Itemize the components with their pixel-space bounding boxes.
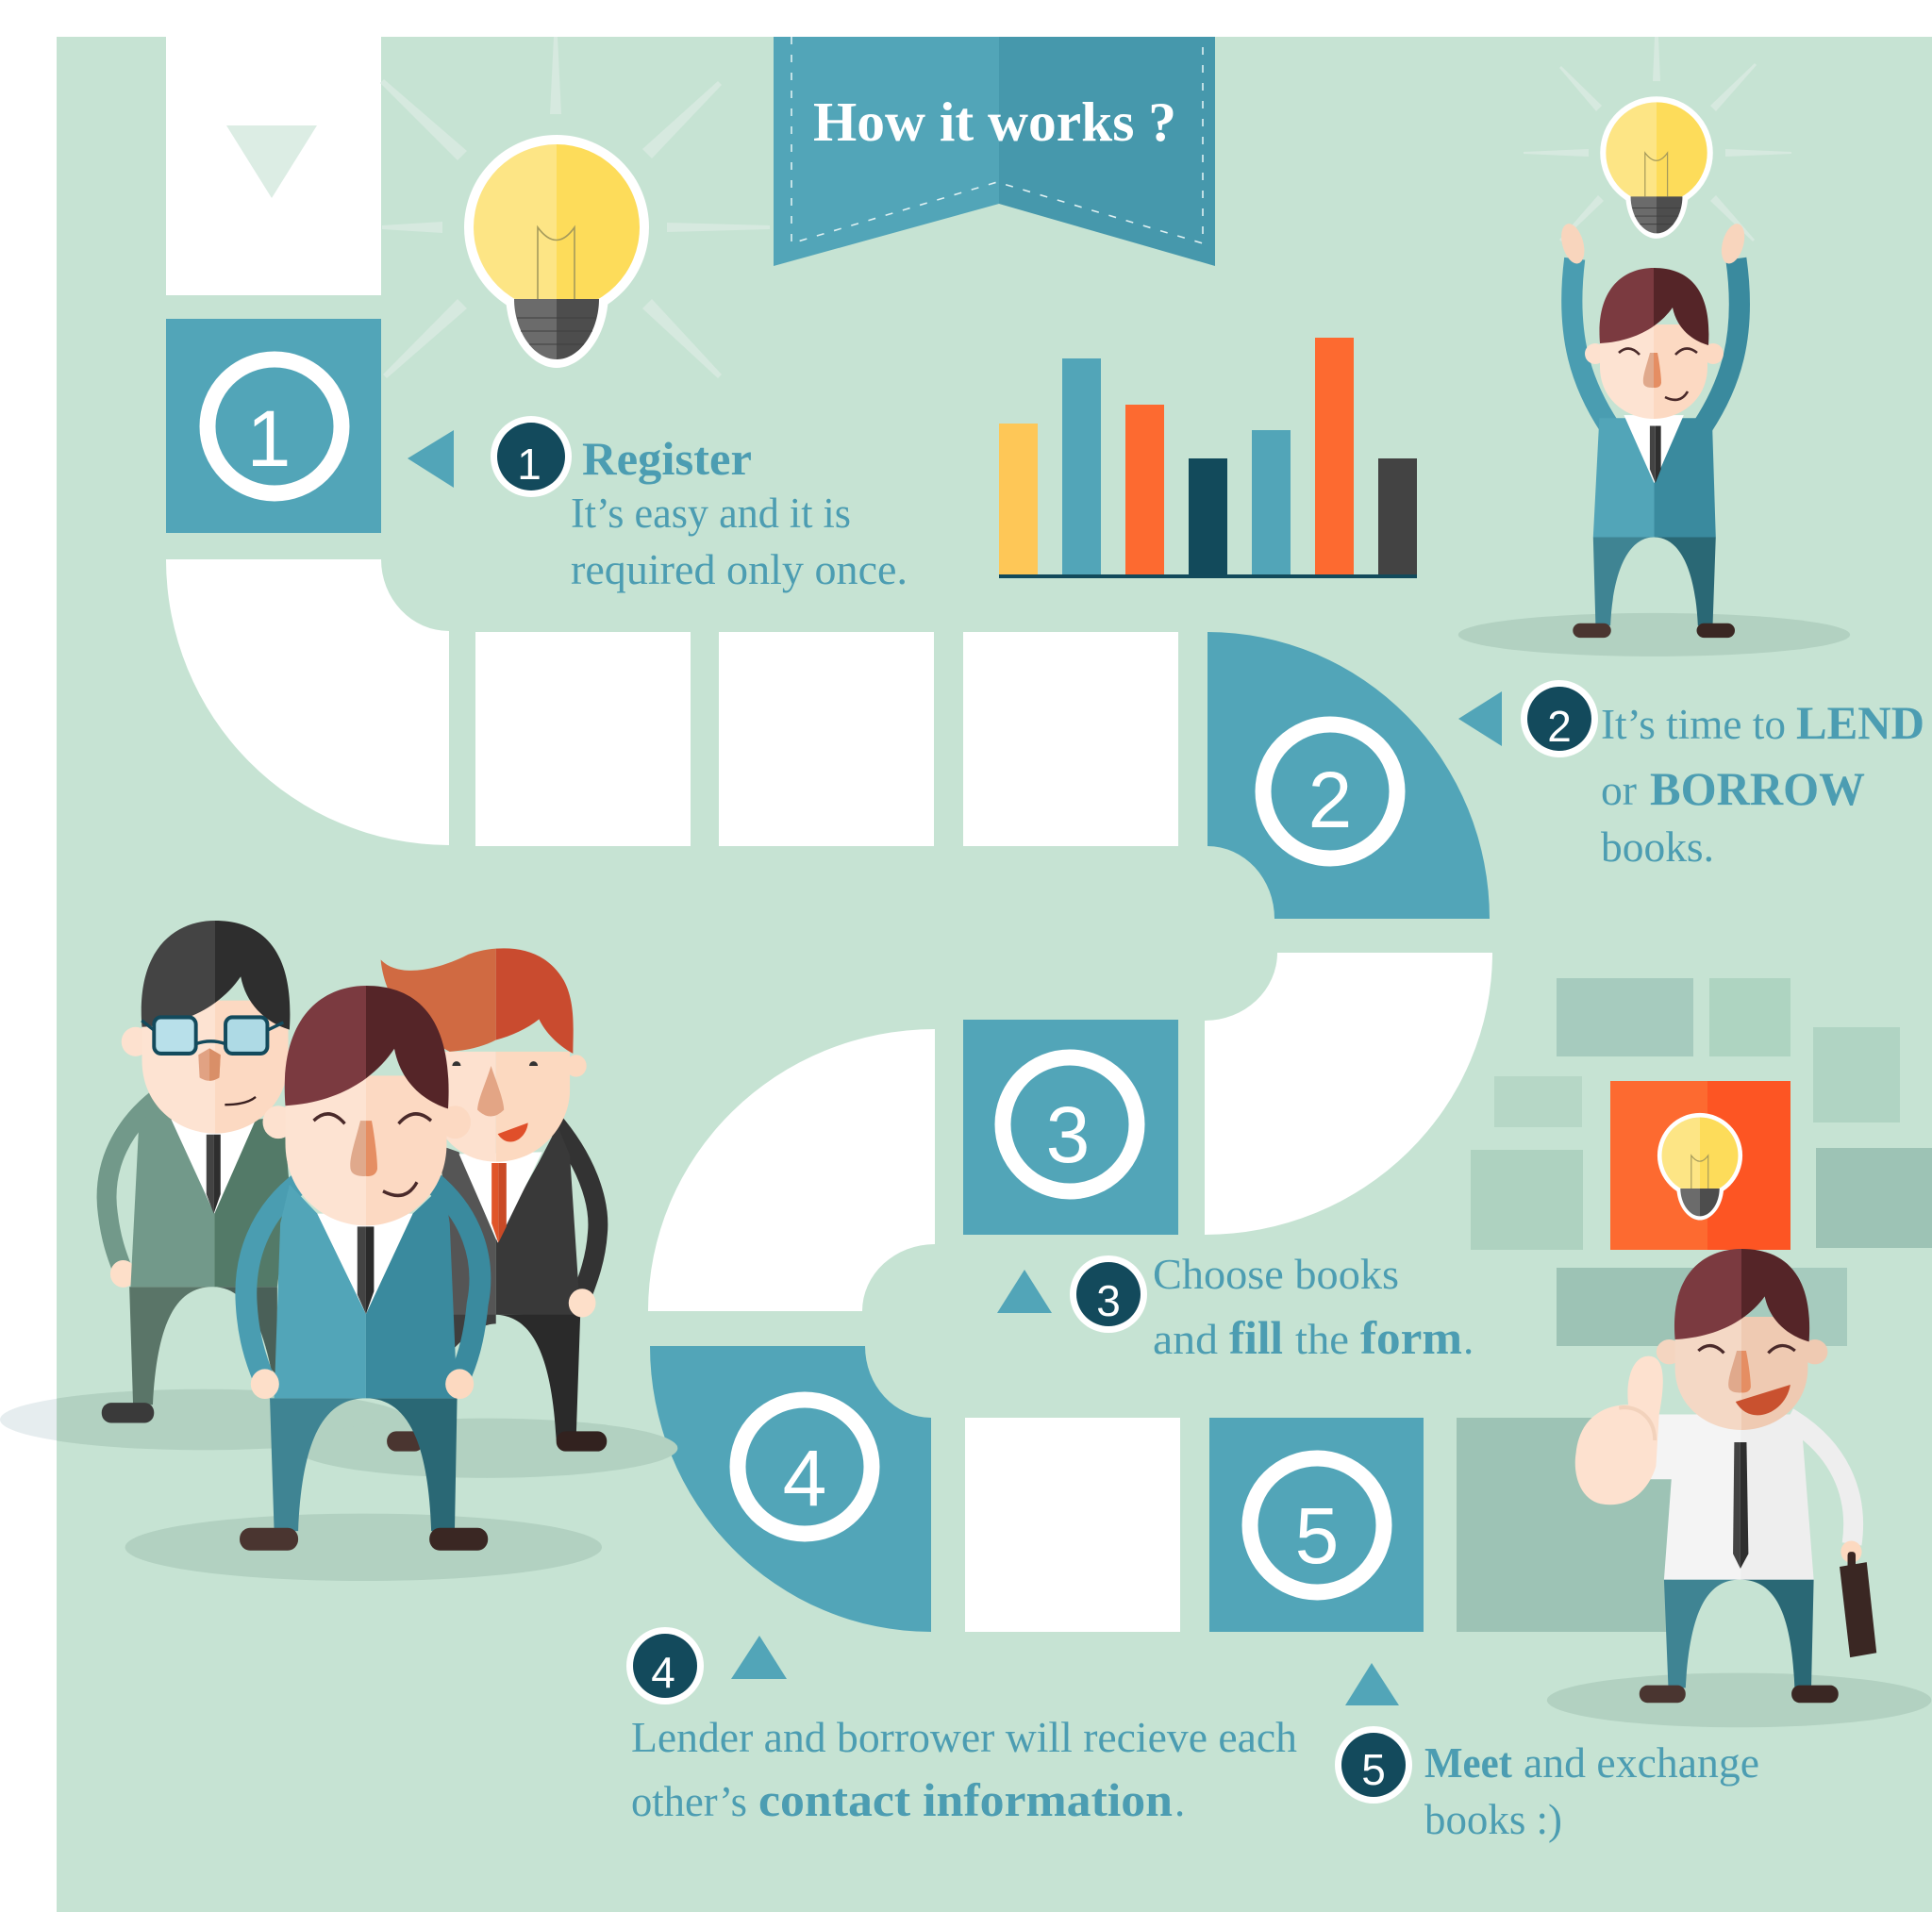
title banner [774, 37, 1215, 266]
start tile [166, 37, 381, 295]
step 1 text [571, 432, 908, 593]
white tiles row one [475, 632, 1178, 846]
off-panel shadow edge [0, 1389, 406, 1450]
step 5 text: and exchange [1524, 1739, 1759, 1787]
briefcase [1840, 1552, 1876, 1657]
curved white tile, top left [166, 559, 449, 845]
character: man raising arms [1458, 222, 1850, 657]
step 4 text: other’s [631, 1778, 747, 1825]
badge 1 [491, 416, 572, 497]
arrow 4 [731, 1636, 787, 1679]
character: man with thumbs up and briefcase [1547, 1249, 1931, 1727]
step tile 3 [963, 1020, 1178, 1235]
step 5 text: Meet [1424, 1738, 1513, 1787]
arrow 1 [408, 430, 454, 488]
step 3 text: Choose books [1153, 1251, 1399, 1298]
small bulb rays [1524, 37, 1791, 241]
front man in blue suit [240, 986, 488, 1551]
start tile triangle [226, 125, 317, 198]
title: How it works ? [813, 91, 1176, 153]
step 3 text: the [1295, 1316, 1349, 1363]
step tile 1 [166, 319, 381, 533]
step 1 text: required only once. [571, 546, 908, 593]
man with red hair [381, 948, 607, 1452]
badge 2: 2 [1547, 702, 1572, 751]
icon: card light bulb [1657, 1113, 1742, 1221]
badge 4: 4 [651, 1648, 675, 1697]
curved white tile, right [1205, 953, 1492, 1235]
arrow 3 [997, 1270, 1052, 1313]
step tile 2 [1208, 632, 1490, 919]
step tile 1: 1 [247, 394, 291, 483]
step tile 4: 4 [783, 1434, 826, 1522]
background blocks [1457, 978, 1932, 1632]
badge 5 [1335, 1726, 1412, 1804]
badge 2 [1521, 680, 1598, 757]
badge 1: 1 [517, 440, 541, 489]
icon: big light bulb [464, 135, 649, 368]
white tile row three [965, 1418, 1180, 1632]
step tile 3: 3 [1046, 1090, 1090, 1179]
badge 3 [1070, 1255, 1147, 1333]
step 3 text: and [1153, 1316, 1218, 1363]
badge 5: 5 [1361, 1745, 1386, 1794]
arrow 5 [1345, 1663, 1399, 1705]
step 2 text: LEND [1796, 696, 1924, 749]
step 1 text: Register [582, 432, 752, 485]
board path tiles [166, 37, 1492, 1632]
bar chart [999, 338, 1417, 578]
badge 4 [626, 1627, 704, 1704]
step tile 2: 2 [1308, 756, 1352, 844]
step 2 text: books. [1601, 823, 1714, 871]
step 2 text: It’s time to [1601, 701, 1786, 748]
curved white tile, middle [648, 1029, 935, 1311]
man with glasses [102, 921, 290, 1422]
shadows [0, 1389, 677, 1581]
step 4 text: contact information [758, 1773, 1173, 1826]
step 1 text: It’s easy and it is [571, 490, 851, 537]
step 5 text: books :) [1424, 1796, 1562, 1843]
step tile 5 [1209, 1418, 1424, 1632]
step 3 text: fill [1229, 1311, 1283, 1364]
group of three businessmen [0, 921, 677, 1581]
step 3 text: . [1463, 1316, 1474, 1363]
step 4 text [631, 1714, 1297, 1826]
big light bulb rays [380, 37, 770, 378]
step 5 text [1424, 1738, 1759, 1843]
step 2 text: BORROW [1650, 762, 1865, 815]
step 3 text [1153, 1251, 1474, 1364]
orange card with bulb [1610, 1081, 1790, 1250]
step 3 text: form [1360, 1311, 1462, 1364]
step 4 text: Lender and borrower will recieve each [631, 1714, 1297, 1761]
badge 3: 3 [1096, 1276, 1121, 1325]
step 4 text: . [1174, 1778, 1185, 1825]
step 2 text [1601, 696, 1924, 871]
icon: raised light bulb [1600, 96, 1713, 239]
step tile 5: 5 [1295, 1491, 1339, 1580]
step 2 text: or [1601, 767, 1637, 814]
step tile 4 [650, 1346, 931, 1632]
arrow 2 [1458, 691, 1502, 746]
